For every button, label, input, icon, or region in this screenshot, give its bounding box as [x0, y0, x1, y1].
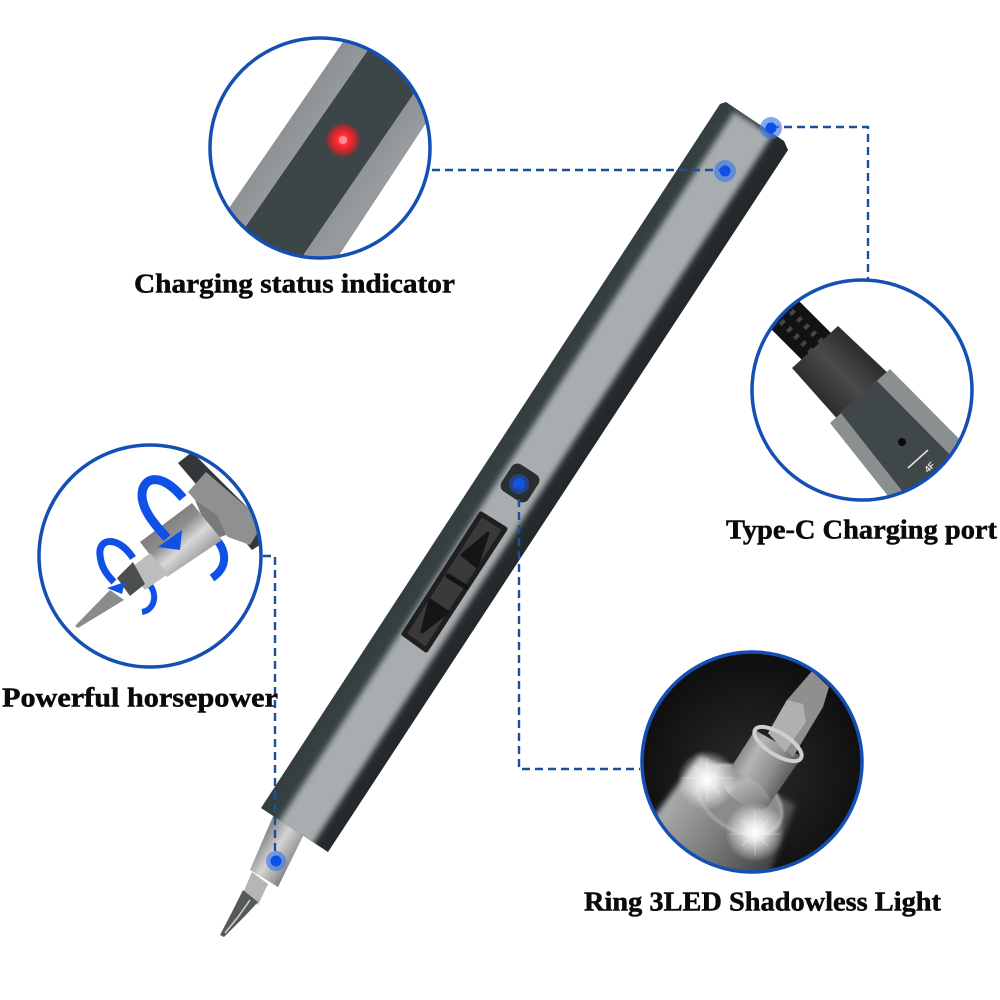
marker dots on the tool	[266, 117, 782, 871]
label: Type-C charging port: Type-C Charging port	[726, 514, 997, 544]
callout circle: ring LED light	[642, 652, 862, 885]
label: ring LED light: Ring 3LED Shadowless Light	[584, 886, 941, 916]
callout circle: Type-C port: 4F	[922, 460, 937, 474]
screwdriver body	[261, 102, 788, 856]
callout circle: charging status indicator	[208, 36, 432, 260]
leader line: horsepower to tip	[263, 556, 275, 860]
leader line: Type-C port	[771, 127, 868, 279]
label: powerful horsepower: Powerful horsepower	[2, 682, 278, 712]
leader line: charging indicator	[432, 169, 725, 171]
callout circle: powerful horsepower	[39, 445, 275, 667]
direction switch	[404, 514, 505, 650]
label: charging status indicator: Charging status indicator	[134, 268, 455, 298]
power button	[498, 461, 542, 505]
callout circle: Type-C port	[750, 278, 974, 502]
leader line: power button to LED	[519, 486, 640, 769]
screwdriver tip	[220, 814, 304, 937]
